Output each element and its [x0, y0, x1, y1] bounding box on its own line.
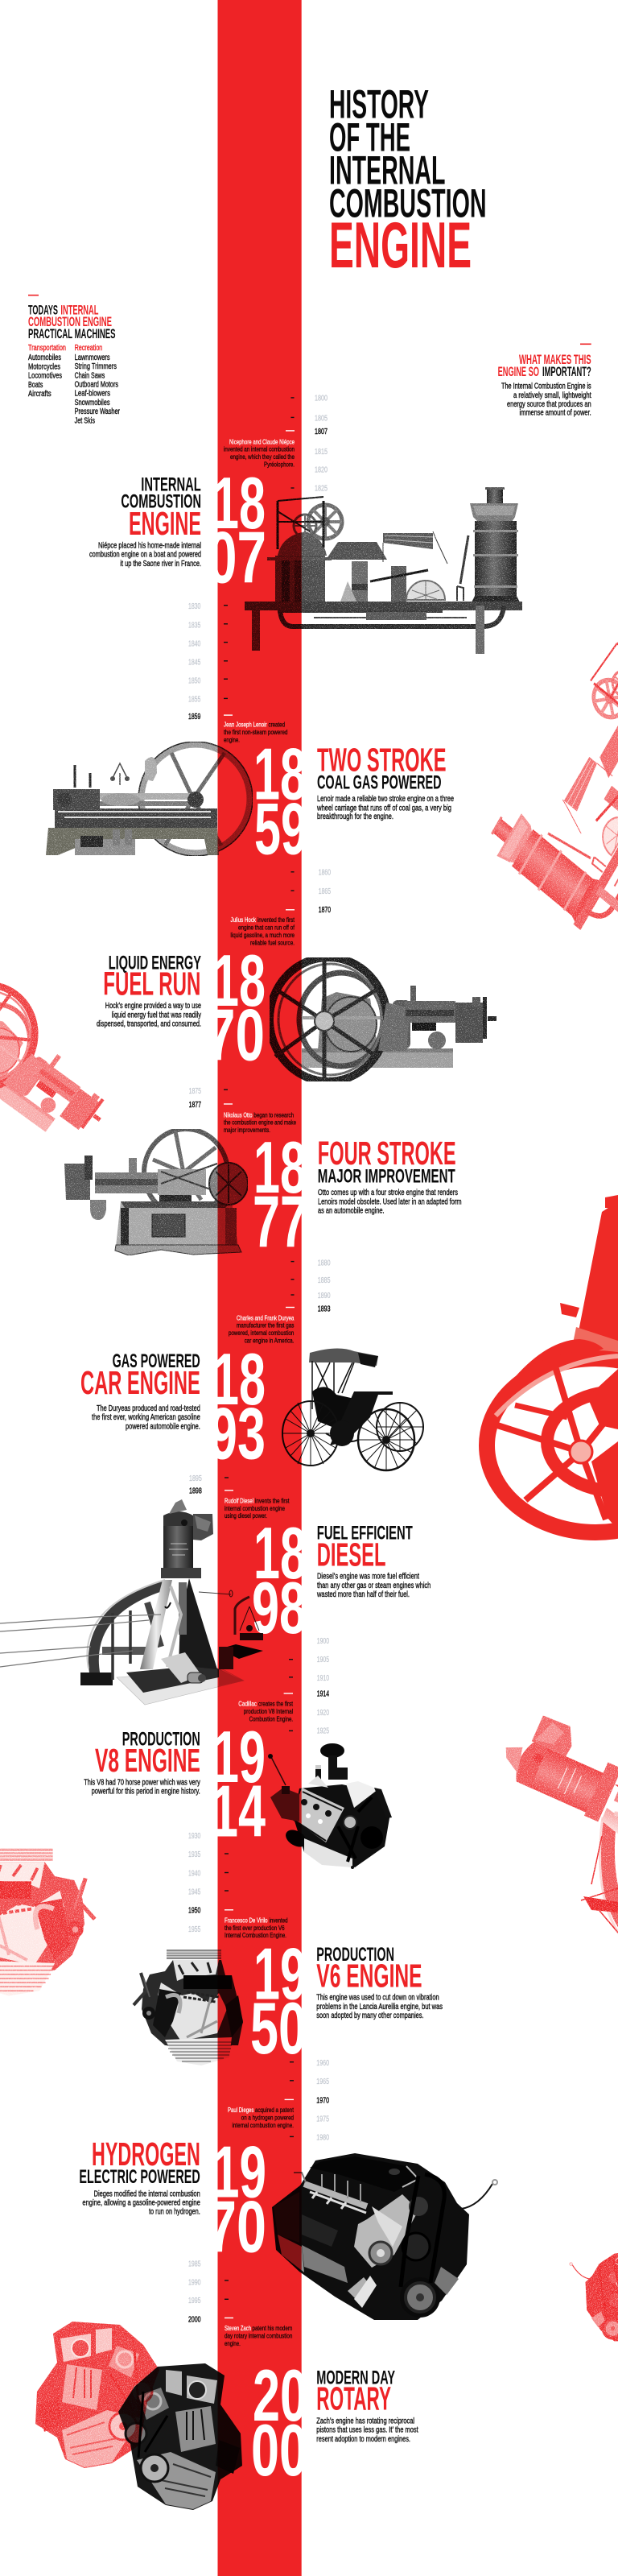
text 1870: [97, 1002, 201, 1029]
caption 1898: Rudolf Diesel: [225, 1496, 253, 1504]
timeline years 1985 to 2000: 1990: [188, 2279, 201, 2287]
red engine ghost: 1870 engine rotated, left edge: [0, 965, 130, 1163]
caption 1807: Pyréolophore.: [264, 460, 295, 468]
timeline years 1960 to 1980: 1965: [316, 2078, 329, 2086]
heading 1877: MAJOR IMPROVEMENT: [318, 1165, 455, 1187]
red engine ghost: giant flywheel and tower, right edge: [487, 1195, 618, 1532]
text 1807: Niépce placed his home-made internal: [98, 541, 201, 551]
caption 1870: engine that can run off of: [238, 924, 295, 932]
year number 1807: [208, 463, 266, 598]
heading 2000: MODERN DAY: [316, 2367, 395, 2388]
text 1870: Hock’s engine provided a way to use: [105, 1002, 201, 1011]
caption 1898: using diesel power.: [225, 1511, 267, 1520]
year number 1970: [207, 2132, 266, 2268]
caption 1950: Francesco De Virilo: [225, 1916, 268, 1925]
timeline years 1960 to 1980: 1975: [316, 2115, 329, 2124]
timeline years 1880 to 1893: 1880: [318, 1259, 331, 1268]
timeline years 1830 to 1859: [188, 602, 233, 722]
caption 1970: internal combustion engine.: [232, 2121, 294, 2129]
timeline years 1930 to 1955: 1940: [188, 1869, 201, 1878]
heading 1859: COAL GAS POWERED: [317, 771, 442, 793]
timeline years 1930 to 1955: [188, 1832, 233, 1934]
engine 1859: [46, 742, 253, 856]
caption 2000: day rotary internal combustion: [225, 2331, 293, 2339]
panel: practical machines: PRACTICAL MACHINES: [28, 327, 116, 341]
year number 1898: 18: [253, 1513, 307, 1594]
timeline years 1880 to 1893: 1885: [318, 1276, 331, 1285]
timeline years 1900 to 1925: 1910: [317, 1674, 329, 1683]
text 1893: powered automobile engine.: [126, 1422, 200, 1431]
text 2000: Zach’s engine has rotating reciprocal: [316, 2417, 414, 2426]
text 1898: [316, 1573, 431, 1599]
caption 1877: [224, 1111, 296, 1134]
engine 2000: [118, 2363, 242, 2510]
timeline years 1800 to 1825: 1800: [315, 394, 328, 403]
text 2000: pistons that uses less gas. It’ the most: [316, 2426, 418, 2435]
timeline years 1900 to 1925: 1925: [317, 1727, 329, 1736]
title: [329, 82, 486, 282]
panel: practical machines: String Trimmers: [75, 362, 117, 371]
timeline years 1960 to 1980: 1960: [316, 2059, 329, 2068]
panel: what makes this engine so important: a relatively small, lightweight: [513, 391, 591, 400]
panel: practical machines: Recreation: [75, 344, 102, 353]
timeline years 1900 to 1925: 1914: [317, 1690, 329, 1699]
year number 1898: [252, 1513, 307, 1649]
caption 1859: [224, 720, 288, 743]
caption 1914: creates the first: [258, 1700, 293, 1708]
panel: what makes this engine so important: ENGINE SO: [498, 365, 539, 379]
year number 1893: 18: [212, 1339, 266, 1420]
text 1807: it up the Saone river in France.: [120, 560, 201, 569]
year number 1877: 18: [253, 1127, 307, 1209]
engine 1877: [64, 1129, 248, 1255]
panel: practical machines: Boats: [28, 381, 43, 390]
heading 1914: V8 ENGINE: [95, 1742, 200, 1779]
timeline years 1800 to 1825: [286, 394, 328, 494]
timeline years 1875 to 1877: 1877: [189, 1101, 201, 1110]
timeline years 1830 to 1859: 1845: [188, 659, 201, 668]
panel: practical machines: Automobiles: [28, 354, 61, 362]
caption 1914: production V8 Internal: [244, 1707, 293, 1715]
year number 1877: [253, 1127, 307, 1263]
heading 1970: HYDROGEN: [92, 2136, 200, 2173]
caption 1859: engine.: [224, 735, 240, 743]
year number 1870: 70: [206, 994, 265, 1076]
text 1893: The Duryeas produced and road-tested: [97, 1404, 200, 1413]
timeline years 1930 to 1955: 1935: [188, 1850, 201, 1859]
year number 2000: [251, 2355, 307, 2491]
timeline years 1830 to 1859: 1850: [188, 676, 201, 686]
panel: practical machines: INTERNAL: [60, 303, 98, 317]
text 2000: [316, 2417, 418, 2444]
caption 1877: the combustion engine and make: [224, 1118, 296, 1127]
year number 1859: [253, 734, 307, 870]
heading 1914: [95, 1729, 200, 1779]
timeline years 1830 to 1859: 1835: [188, 621, 201, 630]
caption 2000: [225, 2324, 293, 2347]
year number 1950: 50: [250, 1988, 307, 2069]
year number 1970: 19: [212, 2132, 266, 2213]
timeline years 1900 to 1925: [284, 1637, 329, 1736]
caption 1970: on a hydrogen powered: [241, 2113, 294, 2121]
timeline years 1930 to 1955: 1955: [188, 1925, 201, 1934]
text 1877: as an automobile engine.: [318, 1206, 385, 1216]
text 1870: liquid energy fuel that was readily: [112, 1011, 201, 1019]
text 1970: Dieges modified the internal combustion: [94, 2189, 200, 2198]
panel: practical machines: TODAYS: [28, 303, 58, 317]
timeline years 1985 to 2000: 1995: [188, 2297, 201, 2305]
caption 1893: Charles and Frank Duryea: [237, 1313, 295, 1321]
panel: what makes this engine so important: immense amount of power.: [520, 409, 591, 418]
text 1950: soon adopted by many other companies.: [316, 2012, 423, 2020]
panel: practical machines: Chain Saws: [75, 371, 105, 380]
heading 1859: TWO STROKE: [317, 742, 446, 779]
caption 1950: the first ever production V6: [225, 1924, 285, 1932]
panel: what makes this engine so important: [498, 343, 591, 418]
timeline years 1875 to 1877: [189, 1087, 233, 1110]
year number 1950: [250, 1933, 307, 2069]
engine 1970: [272, 2153, 497, 2320]
caption 1950: [225, 1916, 288, 1939]
panel: practical machines: [28, 295, 120, 425]
timeline years 1985 to 2000: [188, 2260, 233, 2324]
timeline years 1900 to 1925: 1905: [317, 1656, 329, 1664]
caption 1807: Nicephore and Claude Niépce: [229, 437, 295, 445]
heading 1970: [79, 2136, 200, 2188]
caption 1970: Paul Dieges: [228, 2106, 253, 2114]
text 1859: [316, 795, 454, 821]
heading 1914: PRODUCTION: [122, 1729, 200, 1751]
timeline years 1900 to 1925: 1900: [317, 1637, 329, 1646]
timeline years 1830 to 1859: 1840: [188, 639, 201, 649]
red engine ghost: V6 flipped, left edge: [0, 1849, 95, 1996]
caption 1877: major improvements.: [224, 1126, 270, 1134]
caption 1870: liquid gasoline, a much more: [230, 931, 295, 939]
heading 1807: COMBUSTION: [121, 491, 201, 513]
engine 1950: [134, 1950, 243, 2065]
heading 1970: ELECTRIC POWERED: [79, 2166, 200, 2188]
timeline years 1900 to 1925: 1920: [317, 1709, 329, 1718]
heading 1898: [317, 1522, 413, 1573]
timeline years 1960 to 1980: 1980: [316, 2133, 329, 2142]
panel: practical machines: Leaf-blowers: [75, 390, 110, 399]
caption 1893: powered, internal combustion: [229, 1329, 295, 1337]
caption 1950: invented: [269, 1916, 288, 1925]
text 1877: Lenoirs model obsolete. Used later in an adapted form: [318, 1197, 462, 1206]
timeline years 1930 to 1955: 1950: [188, 1906, 201, 1915]
timeline years 1800 to 1825: 1825: [315, 485, 328, 494]
timeline years 1880 to 1893: [286, 1259, 331, 1313]
panel: practical machines: Transportation: [28, 344, 66, 353]
engine 1898: [0, 1499, 263, 1705]
heading 1807: INTERNAL: [141, 474, 201, 496]
caption 1877: began to research: [253, 1111, 294, 1119]
panel: practical machines: Motorcycles: [28, 362, 60, 371]
heading 1893: GAS POWERED: [113, 1350, 200, 1372]
timeline years 1880 to 1893: 1893: [318, 1305, 331, 1313]
text 1970: to run on hydrogen.: [149, 2208, 200, 2217]
caption 1870: Julius Hock: [230, 916, 257, 924]
timeline years 1895 to 1898: [189, 1474, 233, 1495]
heading 1877: [318, 1135, 456, 1187]
text 1970: [82, 2189, 200, 2217]
timeline years 1930 to 1955: 1945: [188, 1888, 201, 1897]
text 1893: [92, 1404, 200, 1431]
heading 1859: [317, 742, 446, 793]
text 1950: This engine was used to cut down on vibration: [316, 1994, 439, 2003]
text 1898: than any other gas or steam engines which: [317, 1582, 431, 1590]
caption 2000: engine.: [225, 2339, 241, 2347]
timeline years 1860 to 1870: 1870: [319, 906, 331, 915]
text 1877: [318, 1189, 462, 1216]
year number 1870: [206, 941, 266, 1076]
red engine ghost: 1807 engine rotated, right edge: [482, 606, 618, 959]
text 1807: [89, 541, 201, 569]
caption 1859: Jean Joseph Lenoir: [224, 720, 267, 728]
panel: what makes this engine so important: energy source that produces an: [507, 400, 591, 409]
caption 2000: Steven Zach: [225, 2324, 251, 2332]
year number 1950: 19: [253, 1933, 307, 2015]
caption 1870: [230, 916, 295, 946]
text 1970: engine, allowing a gasoline-powered engine: [82, 2198, 200, 2208]
year number 1859: 18: [253, 734, 307, 816]
caption 1970: acquired a patent: [255, 2106, 294, 2114]
red engine ghost: supercharged V8 flipped, right edge: [570, 2247, 618, 2341]
caption 2000: patent his modern: [253, 2324, 293, 2332]
timeline years 1800 to 1825: 1805: [315, 415, 328, 424]
year number 1898: 98: [252, 1568, 307, 1649]
panel: practical machines: Jet Skis: [75, 416, 95, 425]
heading 1870: [103, 952, 201, 1003]
heading 1898: FUEL EFFICIENT: [317, 1522, 413, 1544]
year number 1807: 07: [208, 517, 266, 598]
red engine ghost: rotary flipped, lower left: [35, 2322, 159, 2468]
title: INTERNAL: [329, 148, 446, 193]
timeline years 1880 to 1893: 1890: [318, 1292, 331, 1300]
title: OF THE: [329, 114, 410, 159]
caption 1893: car engine in America.: [245, 1336, 294, 1344]
text 1914: This V8 had 70 horse power which was very: [84, 1778, 200, 1787]
heading 1870: LIQUID ENERGY: [109, 952, 201, 974]
panel: practical machines: Aircrafts: [28, 390, 52, 399]
text 1914: [84, 1778, 200, 1797]
timeline years 1960 to 1980: 1970: [316, 2097, 329, 2105]
year number 1877: 77: [253, 1181, 307, 1263]
heading 1893: [80, 1350, 200, 1401]
timeline years 1830 to 1859: 1830: [188, 602, 201, 611]
engine 1870: [270, 957, 496, 1081]
year number 1893: 93: [209, 1393, 266, 1475]
panel: practical machines: Pressure Washer: [75, 407, 120, 416]
caption 1807: invented an internal combustion: [224, 444, 295, 453]
caption 1870: invented the first: [258, 916, 295, 924]
year number 1807: 18: [212, 463, 266, 544]
timeline years 1895 to 1898: 1898: [189, 1486, 202, 1495]
heading 1870: FUEL RUN: [103, 965, 200, 1003]
heading 1893: CAR ENGINE: [80, 1364, 200, 1401]
text 2000: resent adoption to modern engines.: [316, 2435, 410, 2444]
title: COMBUSTION: [329, 180, 486, 225]
caption 1970: [228, 2106, 294, 2129]
text 1877: Otto comes up with a four stroke engine that renders: [318, 1189, 458, 1197]
year number 1970: 70: [207, 2187, 266, 2268]
panel: practical machines: Outboard Motors: [75, 380, 118, 390]
heading 2000: ROTARY: [316, 2380, 391, 2417]
text 1807: combustion engine on a boat and powered: [89, 551, 201, 560]
caption 1859: created: [269, 720, 285, 728]
panel: practical machines: COMBUSTION ENGINE: [28, 315, 112, 329]
caption 1898: invents the first: [255, 1496, 290, 1504]
heading 1950: V6 ENGINE: [316, 1958, 422, 1995]
text 1950: problems in the Lancia Aureilia engine, but was: [316, 2003, 443, 2012]
title: ENGINE: [329, 209, 472, 282]
heading 2000: [316, 2367, 395, 2417]
text 1859: wheel carriage that runs off of coal gas, a very big: [316, 804, 451, 812]
timeline years 1875 to 1877: 1875: [189, 1087, 201, 1096]
timeline years 1985 to 2000: 2000: [188, 2315, 201, 2324]
heading 1950: PRODUCTION: [316, 1944, 394, 1966]
timeline years 1860 to 1870: [286, 869, 331, 915]
panel: practical machines: Snowmobiles: [75, 399, 110, 407]
title: HISTORY: [329, 82, 429, 127]
panel: practical machines: Lawnmowers: [75, 354, 110, 362]
timeline years 1930 to 1955: 1930: [188, 1832, 201, 1841]
caption 1914: [238, 1700, 293, 1723]
timeline years 1895 to 1898: 1895: [189, 1474, 202, 1483]
red timeline band: [217, 0, 302, 2576]
caption 1898: [225, 1496, 290, 1520]
year number 2000: 20: [253, 2355, 307, 2437]
year number 1859: 59: [254, 788, 307, 870]
text 1893: the first ever, working American gasoline: [92, 1413, 200, 1422]
caption 1807: [224, 437, 295, 468]
text 1870: dispensed, transported, and consumed.: [97, 1020, 201, 1029]
caption 1950: Internal Combustion Engine.: [225, 1931, 286, 1939]
text 1898: wasted more than half of their fuel.: [316, 1590, 410, 1599]
year number 1914: 19: [212, 1717, 266, 1798]
text 1950: [316, 1994, 443, 2020]
carriage 1893: [282, 1348, 423, 1470]
timeline years 1800 to 1825: 1807: [315, 428, 328, 436]
heading 1898: DIESEL: [317, 1536, 386, 1573]
text 1914: powerful for this period in engine history.: [92, 1788, 200, 1797]
engine 1807: [245, 487, 522, 654]
year number 1914: 14: [211, 1772, 266, 1853]
caption 1893: manufacturer the first gas: [237, 1321, 294, 1329]
year number 1870: 18: [212, 941, 266, 1022]
timeline years 1860 to 1870: 1865: [319, 887, 331, 896]
caption 1877: Nikolaus Otto: [224, 1111, 253, 1119]
year number 1914: [211, 1717, 266, 1853]
engine 1914: [268, 1743, 392, 1869]
year number 2000: 00: [251, 2410, 307, 2491]
caption 1914: Combustion Engine.: [249, 1715, 293, 1723]
timeline years 1830 to 1859: 1859: [188, 713, 201, 722]
year number 1893: [209, 1339, 266, 1475]
timeline years 1985 to 2000: 1985: [188, 2260, 201, 2268]
heading 1877: FOUR STROKE: [318, 1135, 456, 1172]
timeline years 1800 to 1825: 1815: [315, 448, 328, 457]
timeline years 1860 to 1870: 1860: [319, 869, 331, 878]
timeline years 1830 to 1859: 1855: [188, 696, 201, 705]
caption 1893: [229, 1313, 295, 1344]
text 1898: Diesel’s engine was more fuel efficient: [317, 1573, 419, 1582]
text 1859: breakthrough for the engine.: [317, 812, 393, 821]
caption 1870: reliable fuel source.: [250, 938, 295, 946]
caption 1807: engine, which they called the: [230, 453, 295, 461]
caption 1914: Cadillac: [238, 1700, 257, 1708]
caption 1859: the first non-steam powered: [224, 728, 288, 736]
heading 1807: [121, 474, 201, 542]
panel: practical machines: Locomotives: [28, 372, 62, 381]
text 1859: Lenoir made a reliable two stroke engine on a three: [317, 795, 454, 804]
heading 1807: ENGINE: [129, 505, 201, 542]
heading 1950: [316, 1944, 422, 1995]
timeline years 1800 to 1825: 1820: [315, 465, 328, 475]
caption 1898: internal combustion engine: [225, 1504, 285, 1512]
red engine ghost: diesel rotated, right edge: [446, 1639, 618, 2003]
timeline years 1960 to 1980: [285, 2059, 329, 2142]
